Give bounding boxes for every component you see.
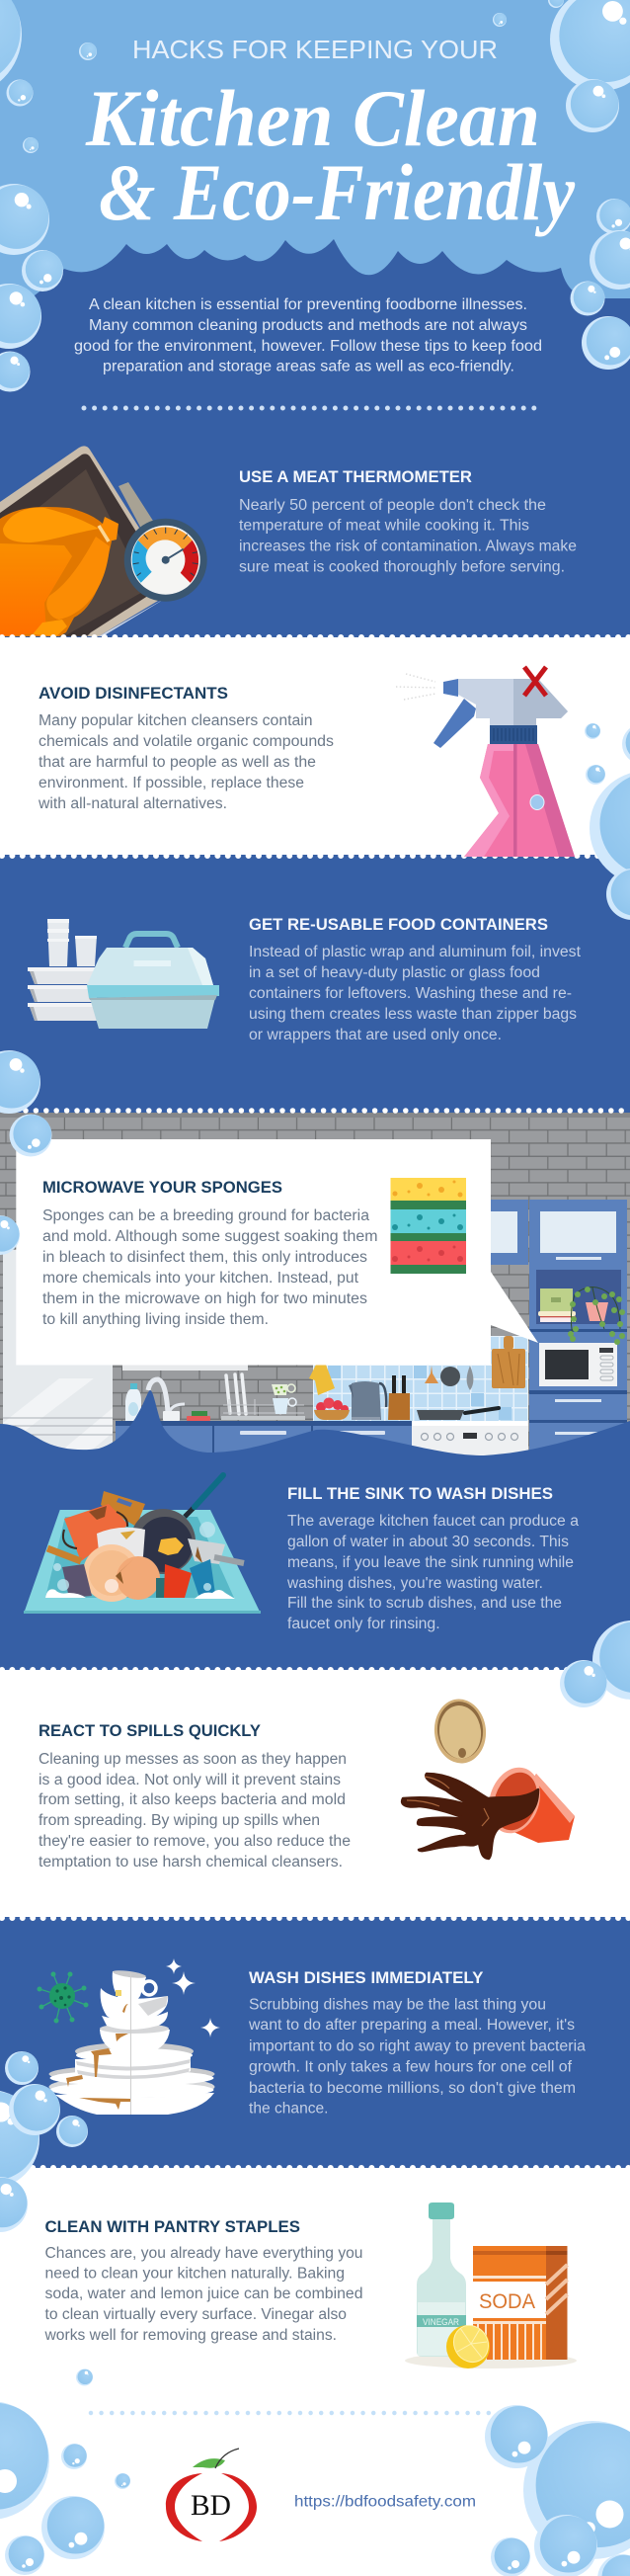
illustration: food containers [28, 919, 219, 1029]
fridge [3, 1250, 113, 1453]
text: meat thermometer body [239, 497, 577, 576]
text: spills body: from setting, it also keeps bacteria and mold [39, 1791, 346, 1808]
tiled backsplash [313, 1336, 528, 1421]
title: kitchen clean and eco-friendly: & Eco-Friendly [99, 147, 576, 237]
text: spills body: from spreading. By wiping up spills when [39, 1812, 320, 1829]
vinegar bottle [417, 2202, 466, 2357]
text: spills body [39, 1751, 351, 1870]
logo: BD apple [166, 2449, 257, 2541]
heading: microwave your sponges: MICROWAVE YOUR SPONGES [42, 1178, 282, 1197]
text: meat thermometer body: Nearly 50 percent of people don't check the [239, 497, 546, 514]
icon: stacked sponges [391, 1178, 466, 1274]
text: sponges body: and mold. Although some suggest soaking them [42, 1228, 377, 1245]
sponge [187, 1411, 210, 1421]
text: sponges body: Sponges can be a breeding ground for bacteria [42, 1207, 370, 1224]
illustration: spilled coffee cup and lid [402, 1697, 575, 1859]
text: sink body: means, if you leave the sink running while [287, 1554, 574, 1571]
text: wash dishes body: Scrubbing dishes may be the last thing you [249, 1997, 546, 2014]
intro text: preparation and storage areas safe as well as eco-friendly. [103, 358, 514, 375]
bubbles: spray section [585, 723, 630, 920]
heading: react to spills quickly: REACT TO SPILLS QUICKLY [39, 1721, 262, 1740]
icon: virus [38, 1972, 89, 2024]
baking soda box: SODA [479, 2290, 535, 2313]
text: sponges body: in bleach to disinfect them, this only introduces [42, 1249, 367, 1266]
text: avoid disinfectants body: environment. If possible, replace these [39, 775, 304, 791]
bubbles: header right [493, 0, 630, 370]
detergent bottle [125, 1383, 141, 1421]
icon: thermometer gauge [124, 519, 207, 602]
frying pan [417, 1408, 499, 1420]
text: pantry staples body: soda, water and lemon juice can be combined [45, 2285, 363, 2302]
text: avoid disinfectants body: Many popular kitchen cleansers contain [39, 712, 313, 729]
bubbles: kitchen left [0, 1050, 51, 1255]
text: sponges body: them in the microwave on high for two minutes [42, 1290, 367, 1307]
text: pantry staples body: Chances are, you already have everything you [45, 2245, 363, 2262]
title: kitchen clean and eco-friendly: Kitchen Clean [85, 73, 540, 163]
counter and lower cabinets [116, 1421, 412, 1465]
panel: avoid disinfectants [0, 637, 630, 856]
text: wash dishes body: the chance. [249, 2101, 328, 2117]
bubbles: footer right [485, 2405, 630, 2576]
illustration: sink full of dirty dishes [24, 1475, 261, 1614]
text: containers body: or wrappers that are used only once. [249, 1027, 502, 1043]
text: sink body: faucet only for rinsing. [287, 1616, 440, 1632]
text: containers body: in a set of heavy-duty plastic or glass food [249, 964, 540, 981]
text: sink body [286, 1513, 580, 1632]
stove [412, 1421, 528, 1460]
text: pantry staples body: need to clean your kitchen naturally. Baking [45, 2266, 345, 2283]
towel [309, 1365, 335, 1395]
text: wash dishes body: important to do so right away to prevent bacteria [249, 2037, 586, 2055]
intro text: good for the environment, however. Follow these tips to keep food [74, 338, 542, 355]
text: sponges body: more chemicals into your kitchen. Instead, put [42, 1270, 359, 1287]
panel: clean with pantry staples [0, 2168, 630, 2576]
hanging plant [568, 1287, 625, 1345]
illustration: vinegar, baking soda and lemon [405, 2202, 577, 2368]
text: containers body: containers for leftovers. Washing these and re- [249, 985, 572, 1002]
text: containers body: using them creates less waste than zipper bags [249, 1006, 577, 1023]
bubbles: header left [0, 0, 97, 391]
heading: fill the sink to wash dishes: FILL THE SINK TO WASH DISHES [287, 1484, 553, 1503]
faucet [148, 1379, 185, 1421]
text: avoid disinfectants body: with all-natural alternatives. [38, 795, 227, 812]
text: wash dishes body: bacteria to become millions, so don't give them [249, 2080, 576, 2097]
text: wash dishes body: growth. It only takes a few hours for one cell of [249, 2059, 573, 2076]
text: spills body: they're easier to remove, you also reduce the [39, 1833, 351, 1850]
heading: use a meat thermometer: USE A MEAT THERMOMETER [239, 467, 472, 486]
text: sink body: Fill the sink to scrub dishes, and use the [287, 1595, 562, 1612]
title: kitchen clean and eco-friendly [85, 73, 576, 237]
text: spills body: temptation to use harsh chemical cleansers. [39, 1854, 343, 1870]
heading: avoid disinfectants: AVOID DISINFECTANTS [39, 684, 228, 703]
bubbles: footer left [0, 2401, 130, 2575]
illustration: spray bottle with red X [396, 667, 575, 857]
text: meat thermometer body: temperature of meat while cooking it. This [239, 518, 529, 535]
text: sink body: gallon of water in about 30 seconds. This [287, 1534, 569, 1550]
dish rack [221, 1374, 305, 1420]
text: wash dishes body [248, 1997, 586, 2117]
lemon [446, 2319, 495, 2368]
text: pantry staples body: works well for removing grease and stains. [43, 2327, 337, 2344]
text: sponges body: to kill anything living inside them. [42, 1311, 269, 1328]
text: sink body: The average kitchen faucet can produce a [287, 1513, 580, 1530]
illustration: roast chicken in tray with thermometer [0, 446, 207, 636]
icon: sparkles [166, 1958, 220, 2037]
fruit bowl [314, 1397, 350, 1420]
shelf niche [529, 1265, 627, 1329]
intro text [74, 296, 542, 375]
heading: wash dishes immediately: WASH DISHES IMMEDIATELY [249, 1968, 484, 1987]
text: containers body: Instead of plastic wrap and aluminum foil, invest [249, 944, 582, 960]
illustration: stacked dirty dishes, virus and sparkles [38, 1958, 220, 2115]
logo: BD apple: BD [191, 2489, 231, 2522]
text: meat thermometer body: sure meat is cooked thoroughly before serving. [239, 559, 565, 576]
heading: clean with pantry staples: CLEAN WITH PANTRY STAPLES [45, 2217, 300, 2236]
text: avoid disinfectants body [38, 712, 334, 812]
intro text: Many common cleaning products and methods are not always [89, 317, 527, 334]
panel: react to spills [0, 1670, 630, 1918]
text: avoid disinfectants body: that are harmful to people as well as the [39, 754, 316, 771]
heading: hacks for keeping your: HACKS FOR KEEPING YOUR [132, 35, 498, 64]
knife block [388, 1375, 410, 1420]
text: containers body [249, 944, 582, 1043]
icon: red X [524, 667, 546, 696]
kettle [349, 1381, 386, 1420]
illustration: kitchen scene [0, 1113, 630, 1477]
intro text: A clean kitchen is essential for preventing foodborne illnesses. [89, 296, 527, 313]
website link: https://bdfoodsafety.com [294, 2494, 476, 2511]
cutting board [492, 1336, 525, 1388]
text: spills body: is a good idea. Not only will it prevent stains [39, 1772, 341, 1788]
text: pantry staples body [43, 2245, 363, 2344]
text: wash dishes body: want to do after preparing a meal. However, it's [248, 2017, 575, 2034]
wave [0, 1390, 630, 1477]
bubbles: sink section right [560, 1620, 630, 1707]
stacked plates [49, 1969, 215, 2115]
stacked cups [272, 1384, 296, 1414]
hanging utensils [425, 1366, 473, 1390]
text: meat thermometer body: increases the risk of contamination. Always make [239, 539, 577, 555]
panel: microwave your sponges callout [16, 1139, 538, 1366]
text: sponges body [42, 1207, 377, 1328]
upper cabinets [491, 1200, 627, 1265]
footer dotted divider [91, 2411, 540, 2415]
heading: get re-usable food containers: GET RE-USABLE FOOD CONTAINERS [249, 915, 548, 934]
vinegar bottle: VINEGAR [423, 2317, 459, 2327]
text: sink body: washing dishes, you're wasting water. [286, 1575, 543, 1592]
bubbles: dishes section left [0, 2051, 93, 2385]
baking soda box [473, 2246, 567, 2360]
range hood [122, 1364, 248, 1371]
header foam panel [0, 0, 630, 316]
microwave cabinet [529, 1329, 627, 1462]
text: pantry staples body: to clean virtually every surface. Vinegar also [45, 2306, 347, 2323]
text: spills body: Cleaning up messes as soon as they happen [39, 1751, 347, 1768]
text: avoid disinfectants body: chemicals and volatile organic compounds [39, 733, 334, 750]
